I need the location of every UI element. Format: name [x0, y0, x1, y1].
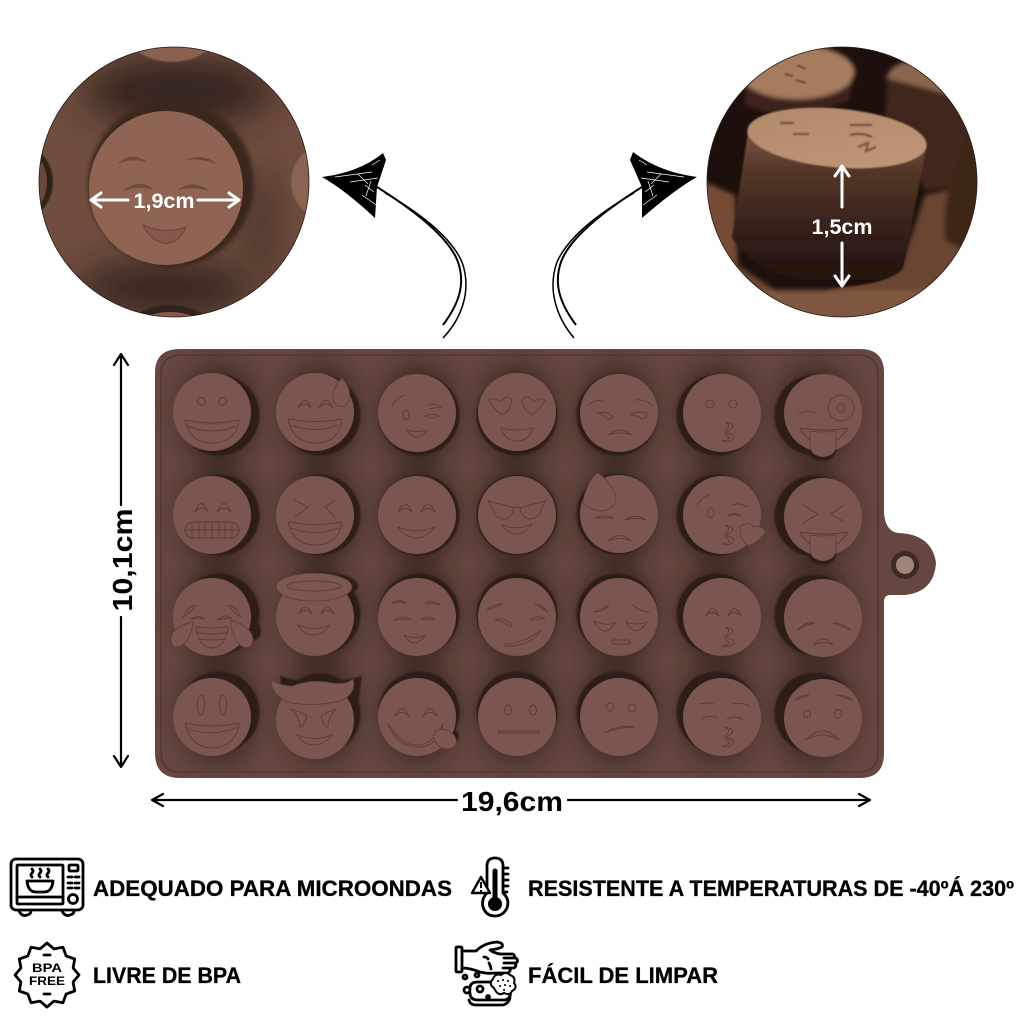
coin: sad sideways look: [580, 374, 658, 452]
coin: blowing kiss: [683, 476, 766, 554]
icon: BPA free badge: FREE: [29, 976, 65, 988]
zoom circle: coin height: [700, 45, 990, 320]
label: temperature resistant: RESISTENTE A TEMPERATURAS DE -40ºÁ 230º: [528, 876, 1014, 901]
dimension: height 10,1cm: [107, 354, 138, 767]
coin: sunglasses: [478, 476, 556, 554]
coin: tongue out smile: [378, 678, 460, 756]
row 1 coins: [173, 373, 862, 457]
coin: happy: [378, 476, 456, 554]
feature: BPA free: [15, 943, 241, 1007]
label: easy to clean: FÁCIL DE LIMPAR: [528, 963, 718, 988]
coin: neutral: [478, 678, 556, 756]
coin: smiling kiss: [683, 578, 761, 656]
silicone tray: [155, 349, 936, 778]
label: microwave safe: ADEQUADO PARA MICROONDAS: [93, 876, 452, 901]
measure: 1,5cm: [812, 166, 872, 286]
coin: heart eyes: [478, 373, 556, 451]
coin: confused: [580, 678, 658, 756]
icon: washing hand: [456, 942, 518, 1005]
coin: cold sweat: [580, 473, 658, 553]
arrow: sketched, pointing to right circle: [553, 152, 697, 338]
coin: squint tongue: [784, 478, 862, 561]
coin: tears of joy: [171, 578, 253, 656]
coin: smiling closed eyes: [378, 578, 456, 656]
coin: wink: [378, 374, 456, 452]
coin shadows: [178, 374, 856, 754]
coin: devil: [271, 679, 354, 759]
coin: frown: [784, 579, 862, 657]
arrow: sketched, pointing to left circle: [322, 153, 466, 338]
coin: squint laugh: [276, 476, 354, 554]
zoom circle: coin diameter: [38, 46, 310, 318]
measure: 1,9cm: 1,9cm: [134, 190, 194, 213]
measure: 1,5cm: 1,5cm: [812, 216, 872, 239]
coin: halo: [276, 573, 354, 656]
icon: microwave: [11, 859, 83, 916]
dimension: width 19,6cm: 19,6cm: [461, 786, 563, 817]
coin: big smile: [173, 373, 251, 451]
measure: 1,9cm: [91, 190, 239, 213]
feature: temperature resistant: [472, 858, 1014, 916]
icon: BPA free badge: [15, 943, 79, 1007]
icon: thermometer: [472, 858, 508, 916]
row 4 coins: [173, 678, 862, 759]
coin: sweat drop: [276, 373, 354, 451]
coin: closed-eye kiss: [683, 678, 761, 756]
feature: easy to clean: [456, 942, 718, 1005]
coin: crazy tongue: [784, 374, 862, 457]
feature: microwave safe: [11, 859, 452, 916]
coin: smirk: [478, 578, 556, 656]
row 3 coins: [171, 573, 862, 657]
row 2 coins: [173, 473, 862, 561]
label: BPA free: LIVRE DE BPA: [93, 963, 241, 988]
coin: kiss: [683, 374, 761, 452]
coin: pensive: [580, 578, 658, 656]
coin: open smile: [173, 678, 251, 756]
dimension: height 10,1cm: 10,1cm: [107, 508, 138, 612]
icon: BPA free badge: BPA: [32, 963, 62, 975]
coin: worried: [784, 679, 862, 757]
coin: grin teeth: [173, 476, 251, 554]
dimension: width 19,6cm: [152, 786, 870, 817]
